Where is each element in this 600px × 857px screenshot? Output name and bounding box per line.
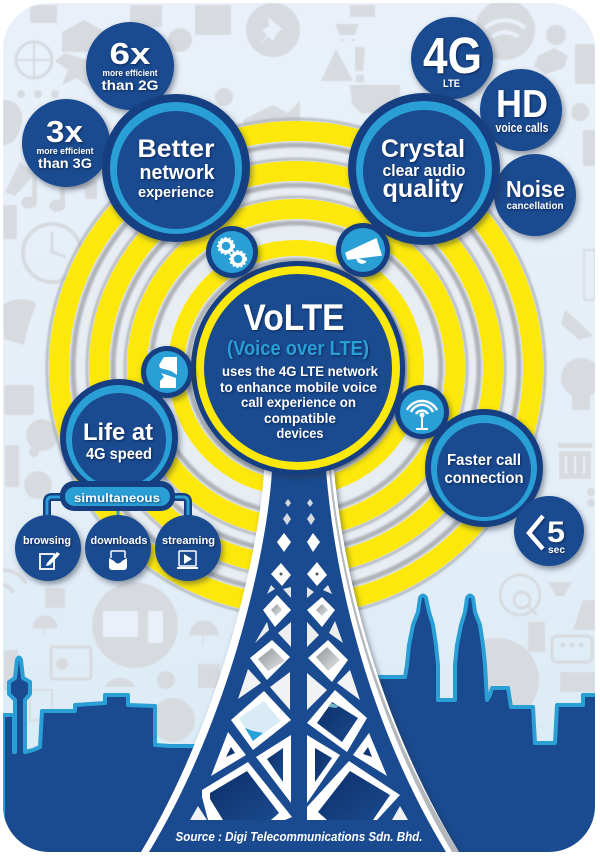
VoLTE heading text: (Voice over LTE) bbox=[227, 338, 369, 360]
panel: crystal clear audio quality: quality bbox=[382, 175, 464, 203]
VoLTE heading text: to enhance mobile voice bbox=[220, 379, 377, 395]
panel: faster call connection bbox=[425, 409, 543, 527]
bubble: 6x more efficient than 2G: 6x bbox=[110, 36, 151, 71]
bubble: downloads: downloads bbox=[90, 535, 148, 547]
skyline bbox=[3, 596, 600, 857]
bubble: under 5 sec: sec bbox=[548, 545, 565, 556]
bubble: 3x more efficient than 3G: more efficient bbox=[36, 146, 94, 156]
signal rings bbox=[47, 119, 545, 617]
bubble: HD voice calls bbox=[480, 69, 562, 151]
icon: swap arrows bbox=[141, 346, 193, 398]
bubble: HD voice calls: HD bbox=[496, 83, 548, 126]
panel: better network experience: Better bbox=[138, 135, 215, 163]
bubble: noise cancellation: Noise bbox=[506, 176, 565, 202]
icon: signal antenna bbox=[395, 385, 449, 439]
VoLTE heading text: uses the 4G LTE network bbox=[222, 363, 378, 379]
bubble: 4G LTE: LTE bbox=[443, 78, 460, 90]
bubble: under 5 sec: 5 bbox=[547, 516, 565, 549]
bubble: 6x more efficient than 2G: than 2G bbox=[102, 77, 159, 93]
panel: better network experience: experience bbox=[138, 184, 214, 201]
tower frame bbox=[141, 470, 459, 852]
bubble: noise cancellation: cancellation bbox=[506, 200, 564, 212]
bubble: browsing bbox=[15, 515, 81, 581]
icon: gears bbox=[206, 226, 258, 278]
bubble: under 5 sec bbox=[514, 496, 584, 566]
panel: better network experience bbox=[102, 94, 250, 242]
panel: faster call connection: connection bbox=[444, 470, 524, 487]
panel: crystal clear audio quality: Crystal bbox=[381, 135, 465, 163]
VoLTE heading text: VoLTE bbox=[244, 297, 344, 338]
icon: megaphone bbox=[336, 223, 390, 277]
bubble: 4G LTE: 4G bbox=[423, 27, 482, 84]
bubble: 3x more efficient than 3G bbox=[22, 99, 110, 187]
tower body bbox=[149, 470, 446, 852]
panel: faster call connection: Faster call bbox=[447, 452, 521, 469]
panel: crystal clear audio quality: clear audio bbox=[382, 161, 466, 180]
pale fill between rings bbox=[49, 121, 543, 615]
bubble: 6x more efficient than 2G: more efficient bbox=[102, 68, 158, 78]
panel: better network experience: network bbox=[140, 162, 215, 184]
bubble: noise cancellation bbox=[494, 154, 576, 236]
bubble: HD voice calls: voice calls bbox=[496, 121, 549, 135]
VoLTE heading text: devices bbox=[276, 425, 324, 441]
bubble: 6x more efficient than 2G bbox=[86, 22, 174, 110]
lattice left bbox=[190, 499, 292, 820]
VoLTE heading text: call experience on bbox=[241, 394, 356, 410]
bubble: streaming: streaming bbox=[162, 535, 215, 547]
panel: life at 4G speed: Life at bbox=[83, 419, 153, 446]
source credit: Source : Digi Telecommunications Sdn. Bhd. bbox=[176, 830, 422, 844]
tower bbox=[141, 470, 459, 852]
panel: crystal clear audio quality bbox=[348, 93, 500, 245]
VoLTE heading text bbox=[220, 297, 378, 441]
bubble: streaming bbox=[155, 515, 221, 581]
central circle: VoLTE bbox=[191, 261, 405, 475]
bubble: 3x more efficient than 3G: than 3G bbox=[38, 155, 92, 171]
bubble: 4G LTE bbox=[411, 17, 493, 99]
panel: life at 4G speed bbox=[60, 379, 178, 497]
connector: simultaneous bracket: simultaneous bbox=[74, 491, 160, 505]
VoLTE heading text: compatible bbox=[264, 410, 336, 426]
bubble: downloads bbox=[85, 515, 151, 581]
connector: simultaneous bracket bbox=[47, 481, 188, 518]
panel: life at 4G speed: 4G speed bbox=[86, 446, 152, 463]
lattice right bbox=[307, 499, 408, 820]
bubble: browsing: browsing bbox=[23, 535, 71, 547]
bubble: 3x more efficient than 3G: 3x bbox=[46, 114, 84, 149]
